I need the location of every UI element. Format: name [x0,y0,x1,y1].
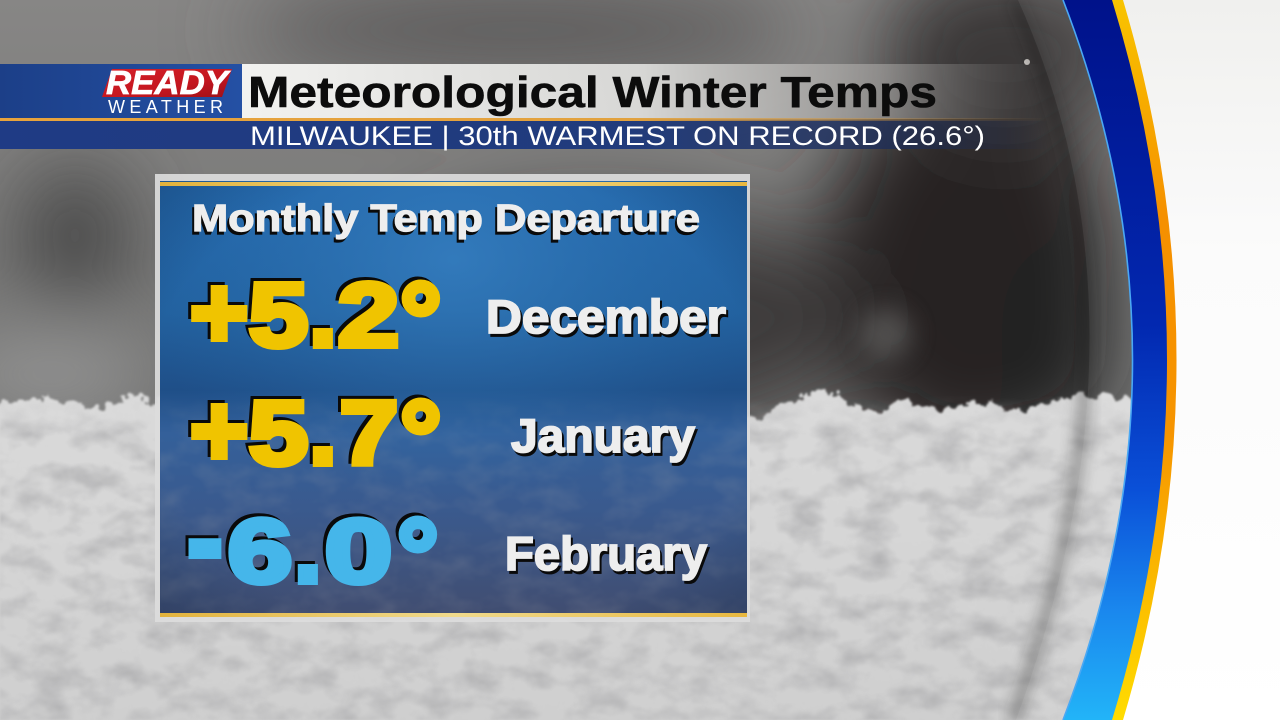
logo: Ready Weather: WEATHER [108,97,223,117]
subtitle band [0,120,1050,149]
value +5.7: 7 [340,384,398,484]
row: December +5.2 [190,256,726,378]
white outer area [1122,0,1280,720]
value +5.2: 2 [338,266,399,366]
label December: December [486,290,726,343]
snow layer [0,388,1150,720]
value +5.2: . [309,256,337,368]
lower third banner [0,64,1050,151]
ring: orange and blue frame [1063,0,1176,720]
value -6.0: 6 [228,502,292,602]
value +5.2: ° [400,262,442,378]
value +5.7: ° [400,380,442,496]
panel: monthly temp departure [155,174,750,622]
logo band [0,64,242,119]
value +5.2: 5 [249,266,308,366]
title band [242,64,1042,119]
value +5.7: 5 [249,384,308,484]
value +5.2 [190,256,442,378]
heading: Monthly Temp Departure [192,198,700,240]
label January: January [511,409,695,462]
value -6.0 [190,492,439,614]
logo: Ready Weather [102,64,232,117]
logo: Ready Weather: READY [106,64,231,101]
value +5.2: + [190,257,248,369]
value +5.7: . [309,374,337,486]
value +5.7 [190,374,442,496]
lens ring inside frame [1013,0,1087,720]
row: February -6.0 [190,492,707,614]
value -6.0: 0 [325,502,392,602]
title: Meteorological Winter Temps [248,68,937,117]
value -6.0: . [294,492,322,604]
value +5.7: + [190,375,248,487]
row: January +5.7 [190,374,695,496]
label February: February [505,527,707,580]
value -6.0: ° [397,498,439,614]
subtitle: MILWAUKEE | 30th WARMEST ON RECORD (26.6°) [250,121,985,151]
value -6.0: - [190,492,220,592]
orange rule [0,118,1050,121]
